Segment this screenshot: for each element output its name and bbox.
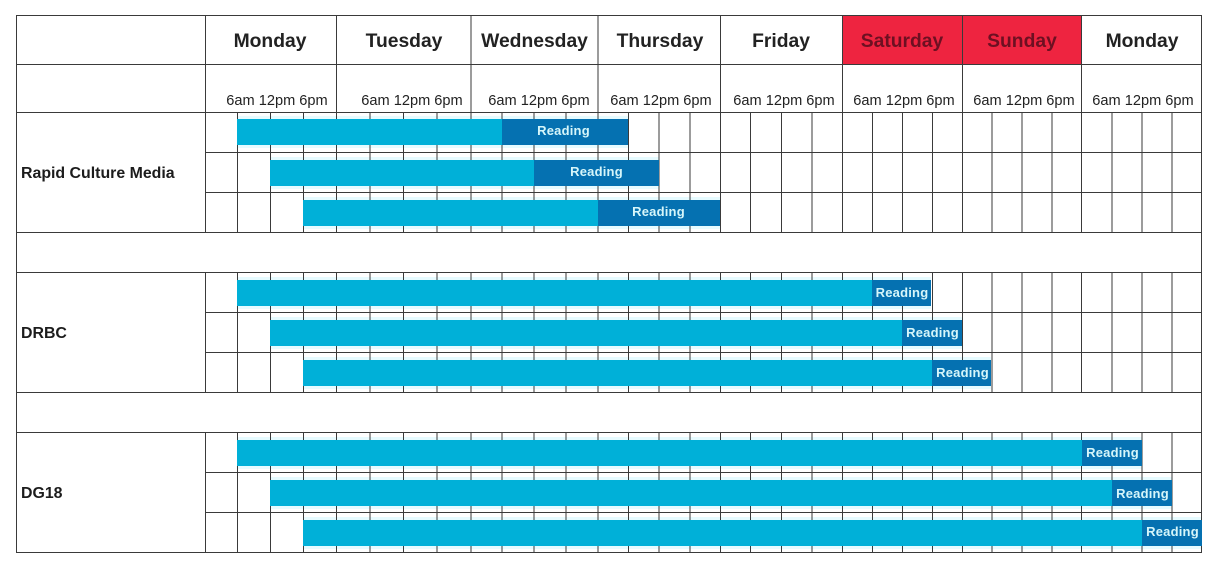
bar: Rapid Culture Media row 1: Reading	[537, 123, 590, 138]
bar: DRBC row 1	[237, 280, 931, 306]
bar: DG18 row 3: Reading	[1146, 524, 1199, 539]
day headings: Saturday	[861, 31, 944, 52]
label: DRBC: DRBC	[21, 325, 67, 342]
weekend header cells	[842, 15, 1081, 64]
bar: DG18 row 1	[237, 440, 1142, 466]
bar: DRBC row 2	[270, 320, 962, 346]
label: Rapid Culture Media: Rapid Culture Media	[21, 165, 175, 182]
bar: DRBC row 1: Reading	[876, 285, 928, 300]
bar: DG18 row 2: Reading	[1116, 486, 1169, 501]
bar: Rapid Culture Media row 3: Reading	[632, 204, 685, 219]
time of day labels	[226, 93, 1194, 109]
bar: DG18 row 2	[270, 480, 1172, 506]
bar: Rapid Culture Media row 2	[270, 160, 659, 186]
time of day labels: 6am 12pm 6pm	[361, 93, 463, 109]
time of day labels: 6am 12pm 6pm	[610, 93, 712, 109]
bar: DRBC row 2: Reading	[906, 325, 959, 340]
day headings: Wednesday	[481, 31, 588, 52]
day headings: Monday	[234, 31, 307, 52]
time of day labels: 6am 12pm 6pm	[1092, 93, 1194, 109]
day headings: Friday	[752, 31, 810, 52]
time of day labels: 6am 12pm 6pm	[488, 93, 590, 109]
group: DRBC	[21, 280, 991, 386]
label: DG18: DG18	[21, 485, 63, 502]
time of day labels: 6am 12pm 6pm	[226, 93, 328, 109]
time of day labels: 6am 12pm 6pm	[733, 93, 835, 109]
day headings: Thursday	[617, 31, 704, 52]
day headings: Sunday	[987, 31, 1057, 52]
bar halos	[237, 116, 1202, 549]
time of day labels: 6am 12pm 6pm	[853, 93, 955, 109]
bar: DRBC row 3	[303, 360, 991, 386]
time of day labels: 6am 12pm 6pm	[973, 93, 1075, 109]
group: Rapid Culture Media	[21, 119, 720, 226]
bar: DG18 row 3	[303, 520, 1202, 546]
day headings: Tuesday	[366, 31, 443, 52]
bar: DRBC row 3: Reading	[936, 365, 989, 380]
bar: Rapid Culture Media row 2: Reading	[570, 164, 623, 179]
bar: DG18 row 1: Reading	[1086, 445, 1139, 460]
group: DG18	[21, 440, 1202, 546]
day headings	[234, 31, 1179, 52]
bar: Rapid Culture Media row 3	[303, 200, 720, 226]
day headings: Monday	[1106, 31, 1179, 52]
bar: Rapid Culture Media row 1	[237, 119, 628, 145]
